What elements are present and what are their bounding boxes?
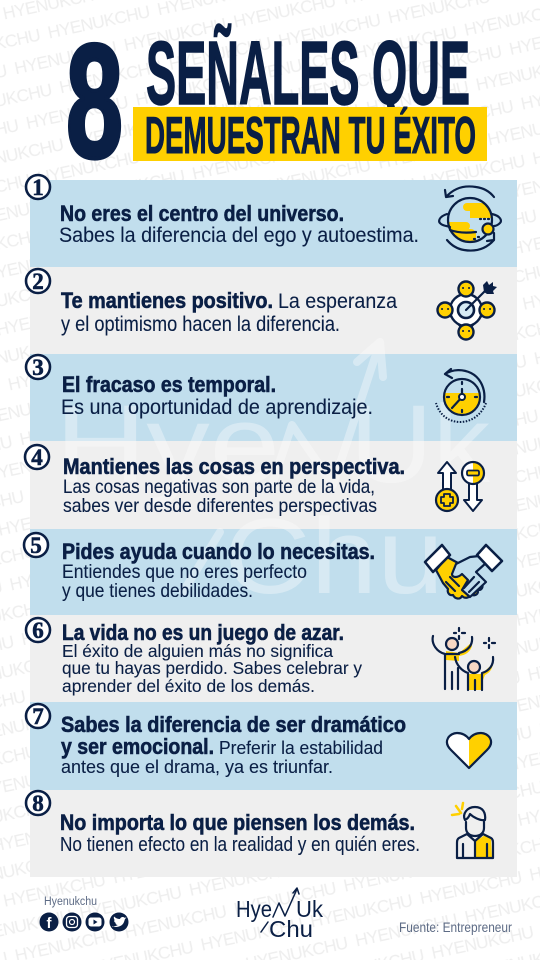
panel 1 [26, 175, 501, 251]
text 8: No importa lo que piensen los demás. [60, 810, 415, 835]
text 7: antes que el drama, ya es triunfar. [61, 756, 333, 777]
large logo watermark [55, 342, 491, 616]
text 2: La esperanza [278, 290, 397, 313]
icon: handshake [425, 545, 502, 599]
text 8 [60, 810, 420, 856]
icon: twitter [110, 912, 128, 932]
text 6: La vida no es un juego de azar. [62, 620, 344, 645]
text 2: y el optimismo hacen la diferencia. [61, 313, 340, 336]
icon: half yellow heart [447, 733, 491, 768]
text 1 [59, 201, 419, 247]
text 2 [61, 288, 397, 336]
text 7: Preferir la estabilidad [219, 737, 383, 758]
social handle: Hyenukchu [44, 896, 97, 908]
number badge 3 [26, 355, 50, 380]
icon: person with spark lines [452, 803, 493, 858]
number badge 1: 1 [32, 175, 44, 200]
text 6: que tu hayas perdido. Sabes celebrar y [62, 658, 362, 678]
text 8: No tienen efecto en la realidad y en quién eres. [60, 834, 420, 856]
large logo watermark: Chu [224, 496, 444, 616]
text 3 [61, 372, 373, 419]
icon: youtube [86, 912, 104, 932]
number badge 7: 7 [32, 704, 44, 729]
logo: Hyenuk Chu: Hye [236, 896, 272, 922]
icon: facebook: f [46, 915, 52, 932]
text 5: y que tienes debilidades. [62, 580, 253, 602]
text 1: Sabes la diferencia del ego y autoestima. [59, 224, 419, 247]
number badge 1 [26, 175, 50, 200]
title number 8: 8 [66, 11, 123, 192]
text 6: El éxito de alguien más no significa [62, 641, 333, 661]
panel 6 [26, 618, 495, 696]
text 3: Es una oportunidad de aprendizaje. [61, 396, 373, 419]
social block [40, 896, 128, 932]
logo: Hyenuk Chu: Chu [269, 916, 313, 942]
number badge 4 [25, 445, 49, 470]
number badge 5: 5 [30, 533, 42, 558]
icon: clock with arrow [436, 369, 486, 422]
number badge 3: 3 [32, 355, 44, 380]
text 4: sabes ver desde diferentes perspectivas [63, 495, 377, 517]
text 4 [63, 454, 405, 517]
text 5: Entiendes que no eres perfecto [62, 561, 307, 583]
icon: instagram [62, 912, 82, 932]
large logo watermark: Hye [55, 383, 280, 506]
text 7: Sabes la diferencia de ser dramático [61, 712, 406, 737]
panel 2 [26, 269, 497, 340]
icon: celebrating people [433, 628, 495, 690]
number badge 4: 4 [31, 445, 43, 470]
panel 3 [26, 355, 486, 422]
number badge 8: 8 [32, 791, 44, 816]
panel 5 [24, 533, 502, 602]
logo: Hyenuk Chu: Uk [296, 896, 323, 922]
number badge 5 [24, 533, 48, 558]
text 6 [62, 620, 362, 696]
icon: globe with rotating arrows [439, 186, 501, 251]
text 6: aprender del éxito de los demás. [62, 676, 315, 696]
text 2: Te mantienes positivo. [61, 288, 273, 313]
text 5 [62, 539, 375, 602]
panel 4 [25, 445, 484, 517]
number badge 6: 6 [32, 618, 44, 643]
text 1: No eres el centro del universo. [60, 201, 344, 226]
number badge 2: 2 [32, 269, 44, 294]
title [66, 11, 487, 192]
icon: up and down arrows with plus and minus [436, 462, 484, 511]
text 5: Pides ayuda cuando lo necesitas. [62, 539, 375, 564]
text 3: El fracaso es temporal. [62, 372, 276, 397]
text 7: y ser emocional. [61, 734, 214, 759]
panel backgrounds [30, 180, 517, 877]
icon: target with smiling faces [438, 281, 497, 340]
number badge 8 [26, 791, 50, 816]
panel 8 [26, 791, 493, 858]
number badge 2 [26, 269, 50, 294]
number badge 7 [26, 704, 50, 729]
source credit: Fuente: Entrepreneur [399, 919, 512, 935]
large logo watermark: Uk [350, 383, 491, 506]
text 4: Las cosas negativas son parte de la vida, [63, 476, 375, 498]
text 4: Mantienes las cosas en perspectiva. [63, 454, 405, 479]
logo: Hyenuk Chu [236, 888, 323, 942]
panel 7 [26, 704, 491, 777]
number badge 6 [26, 618, 50, 643]
text 7 [61, 712, 406, 777]
